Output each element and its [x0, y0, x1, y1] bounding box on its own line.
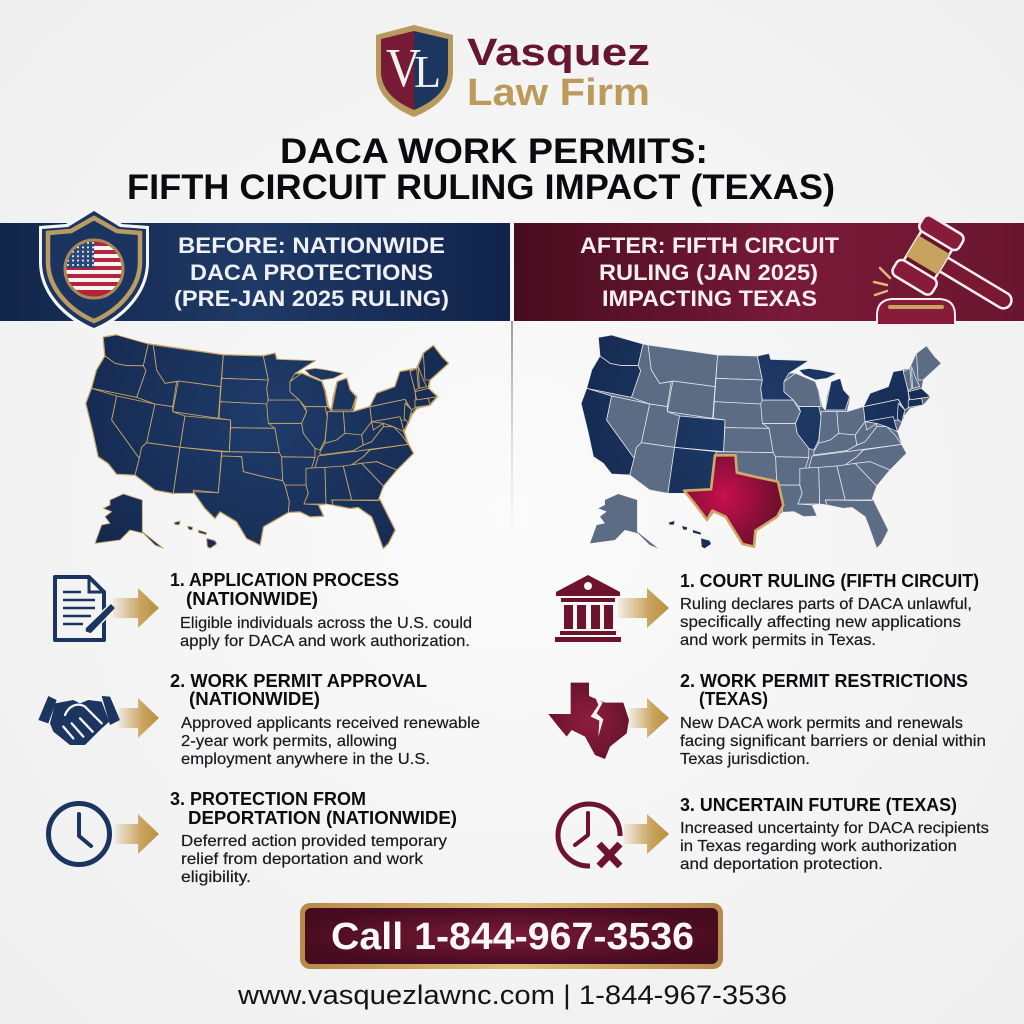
title: [127, 132, 835, 207]
step: protection from deportation: [48, 789, 457, 886]
panel: after banner: [514, 213, 1024, 334]
step text: Texas jurisdiction.: [680, 751, 810, 768]
icon: broken Texas: [548, 683, 629, 759]
step text: 2-year work permits, allowing: [181, 733, 397, 750]
panel: before banner: [0, 208, 510, 332]
divider between columns: [511, 321, 513, 551]
step text: eligibility.: [181, 869, 251, 886]
arrow: [118, 698, 159, 738]
after heading: AFTER: FIFTH CIRCUIT: [580, 233, 839, 258]
step: application process: [55, 570, 472, 650]
icon: clock: [48, 804, 110, 864]
step: work permit restrictions: [548, 671, 986, 768]
step text: Deferred action provided temporary: [181, 833, 447, 850]
step text: [180, 615, 472, 650]
map: nationwide protections: [86, 335, 448, 548]
step heading: 2. WORK PERMIT RESTRICTIONS: [680, 671, 968, 691]
after heading: IMPACTING TEXAS: [602, 286, 817, 311]
step text: Ruling declares parts of DACA unlawful,: [680, 596, 972, 613]
step text: employment anywhere in the U.S.: [181, 751, 430, 768]
logo shield: L: [414, 46, 441, 97]
arrow: [113, 588, 159, 628]
logo wordmark: [467, 32, 650, 114]
step text: [680, 715, 986, 768]
Texas highlight: [684, 455, 783, 547]
step text: and deportation protection.: [680, 856, 883, 873]
icon: courthouse: [555, 575, 621, 642]
after heading: RULING (JAN 2025): [599, 260, 818, 285]
logo shield: [376, 25, 453, 117]
icon: clock with X: [558, 804, 620, 866]
logo shield: V: [386, 37, 421, 98]
logo wordmark: Vasquez: [467, 32, 650, 74]
step: uncertain future: [558, 795, 989, 873]
step text: in Texas regarding work authorization: [680, 838, 957, 855]
step text: [680, 596, 972, 649]
step heading: (TEXAS): [699, 689, 768, 709]
step text: Approved applicants received renewable: [181, 715, 480, 732]
title: DACA WORK PERMITS:: [280, 132, 708, 171]
step heading: [170, 789, 457, 828]
step: court ruling: [555, 571, 979, 649]
step heading: 3. PROTECTION FROM: [170, 789, 366, 809]
step text: facing significant barriers or denial within: [680, 733, 986, 750]
before heading: BEFORE: NATIONWIDE: [178, 233, 445, 258]
arrow: [624, 814, 669, 854]
map: after ruling with Texas highlighted: [581, 335, 941, 548]
step heading: 1. APPLICATION PROCESS: [170, 570, 399, 590]
Hawaii: [669, 521, 711, 548]
icon: document and pencil: [55, 577, 116, 640]
icon: shield with US flag: [39, 208, 149, 332]
icon: gavel: [874, 213, 1024, 334]
step heading: [170, 671, 427, 709]
step text: apply for DACA and work authorization.: [180, 633, 470, 650]
step heading: DEPORTATION (NATIONWIDE): [188, 808, 457, 828]
step heading: 2. WORK PERMIT APPROVAL: [170, 671, 427, 691]
arrow: [629, 698, 669, 738]
step text: and work permits in Texas.: [680, 632, 876, 649]
before heading: (PRE-JAN 2025 RULING): [174, 286, 449, 311]
Hawaii: [174, 521, 217, 548]
step text: [181, 833, 447, 886]
step heading: [680, 671, 968, 709]
step heading: (NATIONWIDE): [186, 589, 318, 609]
step text: Increased uncertainty for DACA recipients: [680, 820, 989, 837]
step text: [181, 715, 480, 768]
call to action button: Call 1-844-967-3536: [331, 916, 694, 958]
flag: [66, 241, 122, 297]
step heading: 3. UNCERTAIN FUTURE (TEXAS): [680, 795, 957, 815]
logo wordmark: Law Firm: [467, 72, 650, 114]
title: FIFTH CIRCUIT RULING IMPACT (TEXAS): [127, 168, 835, 207]
after heading: [580, 233, 839, 311]
step heading: 1. COURT RULING (FIFTH CIRCUIT): [680, 571, 979, 591]
arrow: [115, 814, 159, 854]
step text: [680, 820, 989, 873]
arrow: [618, 588, 669, 628]
step text: New DACA work permits and renewals: [680, 715, 963, 732]
step heading: [170, 570, 399, 609]
Alaska: [95, 494, 163, 548]
step text: Eligible individuals across the U.S. could: [180, 615, 472, 632]
call to action button: [300, 903, 723, 969]
impact sparks: [874, 268, 890, 295]
footer contact line: www.vasquezlawnc.com | 1-844-967-3536: [237, 980, 787, 1010]
Alaska: [590, 494, 658, 548]
step text: relief from deportation and work: [181, 851, 424, 868]
step heading: (NATIONWIDE): [189, 689, 320, 709]
before heading: DACA PROTECTIONS: [190, 260, 433, 285]
logo: [376, 25, 650, 117]
icon: handshake: [38, 696, 120, 745]
step text: specifically affecting new applications: [680, 614, 961, 631]
step: work permit approval: [38, 671, 480, 768]
sound block: [877, 299, 955, 325]
before heading: [174, 233, 449, 311]
